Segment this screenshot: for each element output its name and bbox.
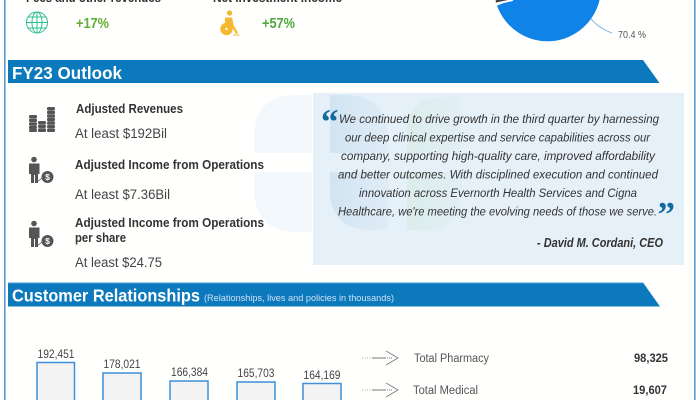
quote mark open: “ bbox=[321, 102, 338, 141]
quote text: company, supporting high-quality care, improved affordability bbox=[341, 149, 656, 163]
leader line bbox=[591, 19, 612, 33]
metric: net investment income bbox=[213, 0, 342, 35]
quote text: Healthcare, we're meeting the evolving needs of those we serve. bbox=[338, 204, 657, 218]
outlook item: adjusted revenues bbox=[29, 102, 183, 141]
heading: Customer Relationships: (Relationships, lives and policies in thousands) bbox=[204, 293, 394, 304]
icon: person with coin: $ bbox=[45, 172, 50, 182]
quote text bbox=[338, 112, 659, 218]
attribution: - David M. Cordani, CEO bbox=[537, 236, 663, 250]
watermark inside panel bbox=[330, 95, 462, 230]
bar: 192,451 bbox=[37, 349, 74, 400]
pie slice: 70.4 % bbox=[497, 0, 600, 41]
quote mark close: ” bbox=[658, 195, 675, 234]
bar: 178,021: 178,021 bbox=[104, 359, 140, 371]
value: +57%: +57% bbox=[262, 16, 295, 32]
arrow bbox=[362, 351, 398, 365]
pie slice: dark segment bbox=[496, 0, 508, 3]
legend row: total pharmacy bbox=[362, 351, 669, 365]
legend row: total medical bbox=[362, 383, 667, 397]
heading bbox=[75, 216, 264, 245]
arrow bbox=[362, 383, 398, 397]
heading: FY23 Outlook: FY23 Outlook bbox=[12, 63, 122, 83]
icon: person with coin bbox=[29, 157, 54, 183]
bar: 164,169 bbox=[303, 370, 341, 400]
heading: per share bbox=[75, 231, 126, 245]
outlook item: adjusted income per share bbox=[29, 216, 264, 270]
heading: Adjusted Revenues bbox=[76, 102, 183, 116]
quote text: We continued to drive growth in the third quarter by harnessing bbox=[339, 112, 659, 126]
label: Total Medical bbox=[413, 385, 478, 397]
icon: wheelchair bbox=[220, 10, 240, 35]
bar: 178,021 bbox=[103, 359, 141, 400]
value: 19,607 bbox=[633, 385, 667, 397]
value: +17%: +17% bbox=[76, 16, 109, 32]
panel: CEO quote bbox=[313, 93, 684, 265]
heading: Customer Relationships: Customer Relationships bbox=[12, 286, 200, 306]
icon: person with coin: $ bbox=[45, 236, 50, 246]
bar: 166,384 bbox=[170, 367, 209, 400]
icon: globe bbox=[26, 12, 48, 33]
label: Total Pharmacy bbox=[414, 353, 489, 365]
outlook item: adjusted income from operations bbox=[29, 157, 264, 202]
heading: Adjusted Income from Operations bbox=[75, 158, 264, 172]
quote text: and better outcomes. With disciplined execution and continued bbox=[338, 168, 659, 182]
heading: Customer Relationships bbox=[8, 282, 660, 306]
watermark logo shapes bbox=[254, 95, 312, 232]
value: 98,325 bbox=[634, 353, 669, 365]
bar: 164,169: 164,169 bbox=[304, 370, 340, 382]
value: At least $192Bil bbox=[75, 126, 167, 141]
icon: coin stacks bbox=[29, 107, 55, 132]
bar: 165,703: 165,703 bbox=[238, 368, 274, 380]
metric: fees and other revenues bbox=[26, 0, 161, 33]
value: At least $24.75 bbox=[75, 255, 162, 270]
quote text: innovation across Evernorth Health Services and Cigna bbox=[359, 186, 637, 200]
icon: person with coin bbox=[29, 221, 54, 247]
pie chart bbox=[496, 0, 646, 41]
value: At least $7.36Bil bbox=[75, 187, 170, 202]
bar chart bbox=[37, 349, 341, 400]
pie label: 70.4 % bbox=[618, 29, 646, 41]
bar: 192,451: 192,451 bbox=[38, 349, 74, 361]
bar: 166,384: 166,384 bbox=[171, 367, 209, 379]
bar: 165,703 bbox=[237, 368, 275, 400]
heading: Adjusted Income from Operations bbox=[75, 216, 264, 230]
heading: FY23 Outlook bbox=[8, 60, 660, 83]
quote text: our deep clinical expertise and service capabilities across our bbox=[345, 130, 651, 144]
